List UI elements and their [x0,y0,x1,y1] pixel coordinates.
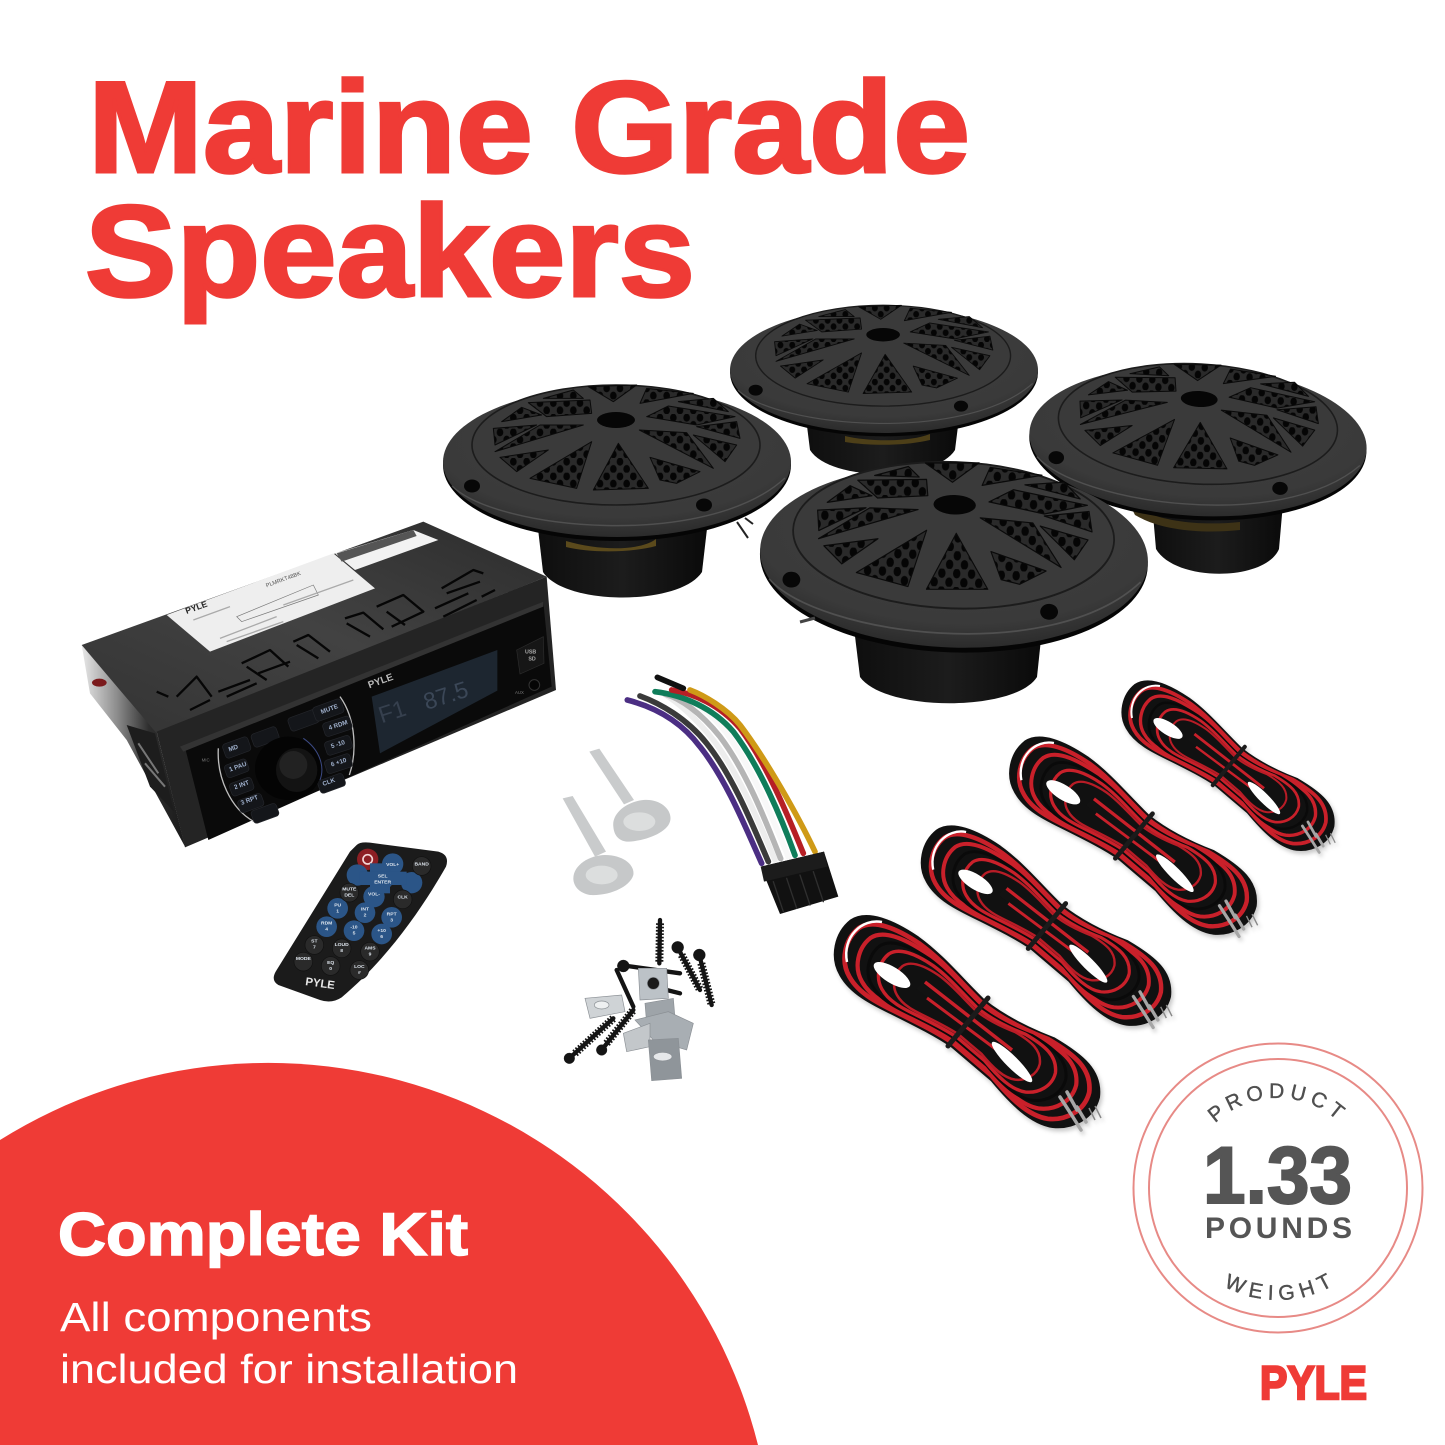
panel body text: included for installation [60,1346,518,1392]
remote dark buttons [294,857,431,979]
control panel: 1 PAU [228,761,248,774]
remote button labels: 6 [380,934,383,940]
USB SD button: USB [525,649,536,655]
speaker: left [443,385,791,598]
control panel: 3 RPT [240,794,259,807]
stereo top face [82,522,547,733]
remote button labels: 5 [353,931,356,937]
display [372,650,497,753]
remote power button [357,849,378,870]
remote button labels: BAND [414,861,429,867]
control panel [202,697,354,824]
remote button labels: INT [361,907,369,913]
brand logo: PYLE [1260,1356,1367,1409]
remote button labels: RDM [321,921,332,927]
remote button labels: SEL [378,873,388,879]
stereo brand: PYLE [367,672,395,691]
remote button labels: 9 [369,951,372,957]
panel heading: Complete Kit [58,1201,468,1268]
stereo side [82,645,185,847]
display: 87.5 [420,676,471,715]
product label: PYLE [184,599,209,616]
product label [167,553,375,652]
remote button labels: VOL+ [386,862,399,868]
badge rings [1134,1044,1422,1332]
remote button labels: MODE [296,956,311,962]
removal keys [563,749,671,895]
remote button labels: MUTE [342,887,357,893]
speaker: front [757,455,1151,703]
wiring harness [627,677,838,914]
display: F1 [375,695,409,728]
USB SD button [517,637,544,674]
remote button labels: VOL- [368,891,380,897]
panel body text: All components [60,1294,372,1340]
screws [564,920,712,1064]
cable bundle 4 [1124,683,1335,852]
remote button labels: ENTER [374,879,392,885]
cable bundle 2 [924,828,1172,1028]
stereo front face [157,577,556,847]
speaker: right [1025,355,1371,574]
title [85,54,970,324]
USB SD button: SD [528,657,536,663]
remote brand: PYLE [305,976,336,992]
harness connector [761,852,838,914]
volume knob [255,737,322,800]
remote button labels: CLK [398,895,408,901]
remote button labels: # [358,970,361,976]
curved text: PRODUCT: PRODUCT [1207,1083,1346,1122]
control panel: 6 +10 [330,757,348,769]
remote button labels: PU [334,903,342,909]
key 1 [589,749,671,842]
remote body [274,842,447,1001]
remote button labels: RPT [387,911,397,917]
remote button labels: 7 [313,945,316,951]
remote button labels: EQ [327,960,334,966]
remote button labels: -10 [350,925,358,931]
red circle background [0,1063,758,1445]
remote button labels: 0 [329,966,332,972]
harness wires [627,677,815,863]
vent slots [157,570,495,710]
speaker: back [730,305,1038,474]
aux jack: AUX [515,690,524,695]
remote button labels: 8 [340,948,343,954]
remote button labels [296,861,429,976]
remote button labels: 1 [336,909,339,915]
control panel: CLK [322,777,337,788]
curved text: WEIGHT: WEIGHT [1227,1272,1328,1300]
badge: product weight [1132,1042,1424,1334]
panel body text [60,1294,518,1392]
key 2 [563,796,633,895]
speakers group [443,305,1371,703]
speaker cables [837,683,1335,1130]
control panel: MIC [202,758,210,763]
cable bundle 3 [1012,739,1258,936]
weight value: 1.33 [1203,1131,1352,1221]
remote button labels: 3 [390,917,393,923]
serial label [335,530,438,570]
remote button labels: 4 [325,927,328,933]
control panel: MD [228,743,240,754]
remote button labels: DEL [344,893,354,899]
aux jack [515,680,540,695]
mounting hardware [564,920,712,1081]
remote button labels: AMS [364,945,376,951]
control panel: 4 RDM [328,719,349,732]
head unit stereo [82,522,556,847]
remote button labels: 2 [364,913,367,919]
control panel: 5 -10 [330,739,346,750]
remote control [274,842,447,1001]
remote blue buttons [316,853,422,944]
control panel: MUTE [320,703,339,716]
weight unit: POUNDS [1205,1212,1352,1245]
remote button labels: +10 [377,928,386,934]
title line: Speakers: Speakers [85,178,695,324]
clips [585,968,693,1081]
panel: complete kit [0,1063,758,1445]
title line: Marine Grade: Marine Grade [88,54,970,200]
remote button labels: LOUD [335,942,349,948]
product label: PLMRKT48BK [265,571,302,589]
remote button labels: LOC [354,964,365,970]
control panel: 2 INT [233,779,250,791]
cable bundle 1 [837,918,1101,1130]
remote button labels: ST [311,939,318,945]
